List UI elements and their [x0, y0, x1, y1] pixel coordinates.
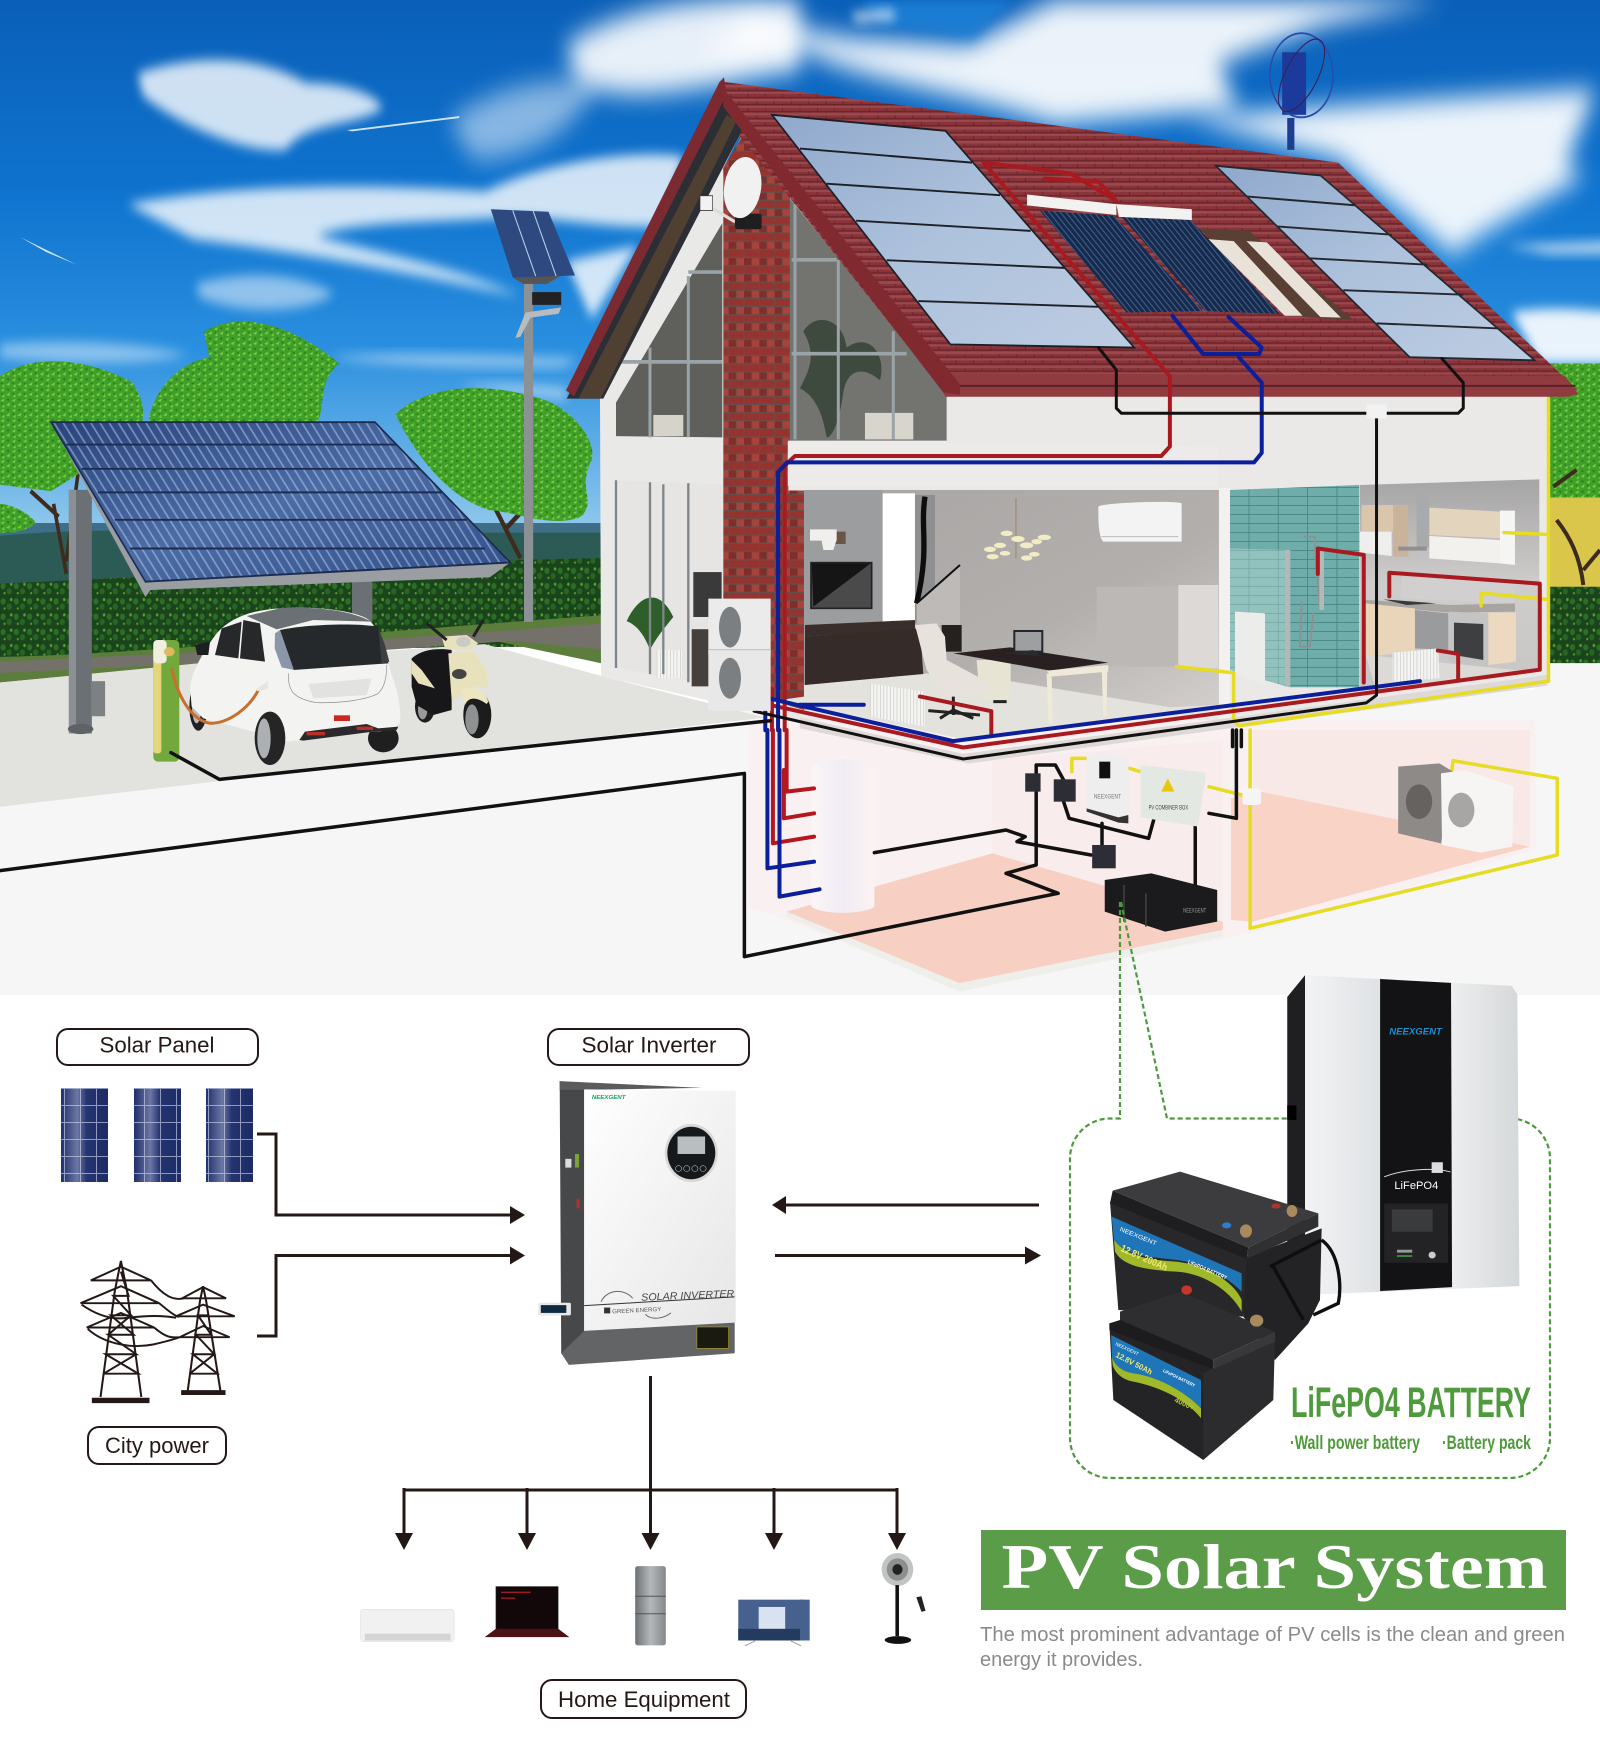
carport solar array	[51, 422, 510, 734]
left roof solar array	[772, 115, 1134, 348]
desk	[953, 630, 1108, 723]
description text: energy it provides.	[980, 1649, 1143, 1671]
arrow tree: inverter to home equipment	[395, 1376, 906, 1550]
hot water storage tank	[811, 759, 874, 913]
basement solar inverter: NEEXGENT	[1094, 792, 1121, 800]
blue cold water pipes	[753, 316, 1420, 741]
tree centre	[148, 321, 339, 424]
solar inverter product	[538, 1081, 736, 1365]
kitchen	[1360, 479, 1539, 692]
basement heating pipes	[767, 730, 820, 897]
roof	[722, 82, 1578, 397]
fan remote	[916, 1596, 926, 1612]
basement battery bank	[1105, 873, 1217, 932]
wall sconce	[810, 529, 846, 550]
basement walls	[812, 720, 1211, 754]
wall TV	[811, 563, 872, 608]
title banner	[981, 1530, 1566, 1610]
house upper structure and pipes	[722, 82, 1578, 763]
junction box	[1366, 404, 1387, 418]
icon: refrigerator	[635, 1566, 666, 1645]
white gable wall	[672, 136, 740, 266]
lithium battery 12V 50Ah	[1109, 1285, 1275, 1460]
satellite dish	[700, 152, 767, 229]
hedge	[0, 558, 601, 658]
gable insulation	[578, 115, 737, 399]
stairs	[917, 565, 962, 652]
solar inverter product: NEEXGENT	[592, 1095, 627, 1101]
sofa	[805, 620, 923, 685]
battery type labels: ·Wall power battery	[1290, 1433, 1420, 1454]
lithium battery 12V 50Ah: 4000+	[1173, 1395, 1196, 1412]
conduit box	[1242, 788, 1261, 805]
house body	[600, 137, 1547, 762]
wall power battery: LiFePO4	[1394, 1180, 1438, 1192]
lithium battery 12V 200Ah: 12.8V 200Ah	[1119, 1243, 1169, 1274]
grass strip and path	[0, 615, 601, 682]
panel: house scene illustration	[0, 0, 1600, 1000]
EV charger, car and scooter	[153, 608, 491, 765]
gable dark fascia	[567, 92, 742, 399]
basement equipment and wiring	[744, 730, 1557, 957]
DC meters	[1025, 773, 1116, 868]
gutter	[934, 373, 1578, 397]
bathroom and kitchen	[1230, 479, 1539, 692]
brick chimney wall	[723, 137, 804, 710]
icon: three solar panels	[61, 1088, 253, 1182]
handle cable	[1270, 1240, 1340, 1320]
carport support pole left	[68, 490, 105, 734]
office chair	[915, 623, 1007, 718]
tree right	[395, 388, 592, 558]
ground block	[0, 644, 1600, 1000]
lithium battery 12V 50Ah: NEEXGENT	[1115, 1341, 1139, 1357]
label: City power: City power	[105, 1433, 209, 1458]
icon: power pylons	[81, 1261, 235, 1400]
main roof surface	[722, 82, 1578, 390]
red hot water pipes	[759, 163, 1540, 748]
label: Solar Panel: Solar Panel	[100, 1032, 214, 1058]
rooftop wind turbine	[1270, 30, 1333, 150]
electric car	[189, 608, 400, 765]
heat pump units	[708, 599, 771, 711]
tilted solar panel	[51, 422, 510, 597]
terminals	[1240, 1224, 1252, 1238]
arrow: city power to inverter	[257, 1246, 525, 1336]
wall power battery: NEEXGENT	[1389, 1027, 1443, 1037]
trees behind carport	[0, 321, 601, 682]
icon: television	[738, 1600, 804, 1646]
yellow basement wiring	[1072, 730, 1557, 928]
carport support pole right	[352, 582, 372, 622]
lid	[1113, 1172, 1318, 1247]
label: Solar Panel	[57, 1029, 258, 1065]
roof skylight	[1198, 228, 1354, 320]
floor slab	[800, 675, 1547, 763]
floor	[780, 673, 1220, 740]
right background tree and hedge	[1535, 364, 1600, 690]
washing machines	[1398, 763, 1513, 853]
label: Home Equipment: Home Equipment	[558, 1687, 730, 1712]
lithium battery 12V 50Ah: LiFePO4 BATTERY	[1162, 1368, 1196, 1388]
dashed callout from battery bank	[1070, 902, 1550, 1478]
gable red trim	[566, 77, 727, 397]
label	[1111, 1335, 1201, 1408]
sky background	[0, 0, 1600, 560]
roof edge trim	[723, 88, 960, 395]
home appliances	[361, 1566, 804, 1646]
terminals	[1250, 1315, 1263, 1327]
radiator	[870, 683, 925, 727]
lithium battery 12V 200Ah: LiFePO4 BATTERY	[1187, 1260, 1228, 1282]
window opening	[883, 493, 915, 622]
label: City power	[88, 1427, 226, 1464]
description text: The most prominent advantage of PV cells is the clean and green	[980, 1624, 1565, 1646]
solar inverter product: SOLAR INVERTER	[641, 1289, 735, 1304]
lid	[1120, 1292, 1275, 1360]
lamp solar panel	[491, 209, 575, 277]
bathroom	[1230, 485, 1359, 687]
wall power battery	[1287, 975, 1519, 1295]
basement solar inverter	[1087, 753, 1128, 823]
basement battery bank: NEEXGENT	[1183, 907, 1206, 914]
inverter display	[665, 1124, 718, 1182]
EV charging post	[153, 640, 268, 762]
upper floor window	[788, 199, 947, 451]
gable trim and roof edge	[566, 77, 960, 399]
room back wall	[804, 490, 1219, 710]
chandelier	[984, 498, 1051, 561]
label: Home Equipment	[541, 1680, 746, 1718]
label	[1112, 1217, 1242, 1292]
label: Solar Inverter	[548, 1029, 749, 1065]
clouds	[0, 0, 1600, 399]
arrow: solar panel to inverter	[257, 1134, 525, 1224]
title banner: PV Solar System	[1002, 1531, 1548, 1602]
glass doors	[616, 480, 723, 686]
icon: standing fan and remote	[800, 1553, 926, 1644]
arrow: battery to inverter	[775, 1246, 1041, 1264]
yellow AC wiring in upper floors	[1177, 399, 1548, 726]
solar inverter product: GREEN ENERGY	[612, 1307, 662, 1315]
lithium battery 12V 50Ah: 12.8V 50Ah	[1114, 1350, 1154, 1377]
lithium battery 12V 200Ah: NEEXGENT	[1119, 1227, 1158, 1247]
wall pillar	[1219, 488, 1230, 720]
laptop	[1005, 630, 1043, 657]
distant landscape	[0, 523, 602, 587]
battery body	[1109, 1323, 1213, 1460]
panel: diagram	[57, 902, 1566, 1718]
PV combiner box	[1140, 765, 1206, 827]
icon: air conditioner	[361, 1609, 454, 1641]
living room	[780, 490, 1220, 740]
left-side house details	[700, 152, 771, 711]
tree left	[0, 361, 143, 574]
arrow: inverter to battery	[772, 1196, 1039, 1214]
right tree trunk	[1553, 470, 1600, 585]
right roof solar array	[1216, 166, 1535, 360]
street lamp with solar panel	[491, 209, 575, 622]
black basement wiring	[744, 730, 1241, 957]
basement shell	[748, 720, 1535, 992]
standing fan	[882, 1553, 913, 1644]
air conditioner	[1098, 502, 1182, 542]
label: Solar Inverter: Solar Inverter	[582, 1032, 716, 1058]
lithium battery 12V 200Ah	[1110, 1172, 1340, 1360]
scooter	[412, 620, 491, 738]
ceiling slab band	[788, 441, 1218, 486]
description text	[980, 1624, 1565, 1671]
house front gable wall	[602, 131, 947, 710]
black DC cables	[754, 348, 1463, 759]
PV combiner box: PV COMBINER BOX	[1149, 803, 1188, 811]
battery type labels: ·Battery pack	[1442, 1433, 1531, 1454]
basement floors	[787, 853, 1223, 983]
icon: laptop	[485, 1587, 569, 1637]
solar thermal collectors	[1027, 195, 1280, 314]
gable window upper	[613, 223, 722, 437]
battery body	[1243, 1228, 1322, 1360]
underground power cables	[0, 721, 770, 871]
